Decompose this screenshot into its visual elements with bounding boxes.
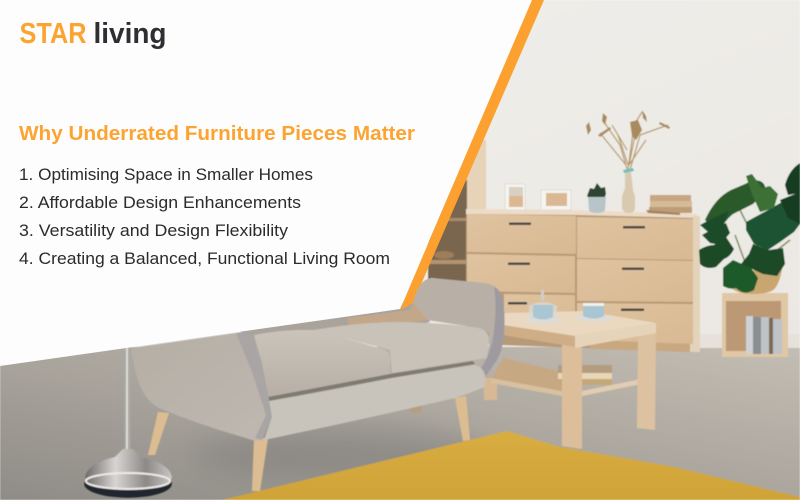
orange diagonal stripe (400, 0, 544, 310)
throw pillow (347, 298, 429, 328)
cushion shadow seam (268, 361, 475, 401)
left seat cushion (254, 330, 390, 400)
dresser (466, 209, 700, 352)
sofa legs (148, 396, 470, 491)
wooden side shelf (428, 140, 486, 282)
logo: STAR: STAR (20, 18, 87, 50)
list item 2: 2. Affordable Design Enhancements (19, 194, 301, 212)
floor lamp (84, 340, 172, 498)
heading: Why Underrated Furniture Pieces Matter (19, 123, 415, 145)
yellow rug (222, 431, 800, 500)
list item 4: 4. Creating a Balanced, Functional Living Room (19, 250, 390, 268)
logo: living: living (94, 18, 166, 50)
drawer handles (508, 222, 645, 311)
floor reflection under sofa (190, 427, 490, 483)
skirting board (697, 334, 800, 348)
picture frames (505, 184, 571, 210)
sofa arm overlapping stripe (413, 278, 445, 320)
stacked books on dresser (646, 195, 692, 215)
monstera plant in basket (699, 163, 800, 294)
sofa back (240, 300, 430, 365)
white text panel (0, 0, 532, 366)
floor (0, 347, 800, 500)
list item 1: 1. Optimising Space in Smaller Homes (19, 166, 313, 184)
logo (20, 18, 166, 50)
teacups on table (526, 290, 612, 324)
potted succulent (587, 183, 606, 213)
list of topics (19, 166, 390, 268)
vase with dried wheat (586, 110, 670, 213)
cube side table (722, 293, 788, 357)
left arm (131, 332, 269, 441)
table leg over rug (562, 400, 582, 449)
sofa front base (264, 365, 485, 440)
right seat cushion (313, 322, 489, 373)
list item 3: 3. Versatility and Design Flexibility (19, 222, 289, 240)
sofa (131, 278, 505, 491)
coffee table (484, 311, 656, 448)
right arm (414, 278, 505, 377)
wall (0, 0, 800, 350)
books under table (558, 365, 612, 385)
